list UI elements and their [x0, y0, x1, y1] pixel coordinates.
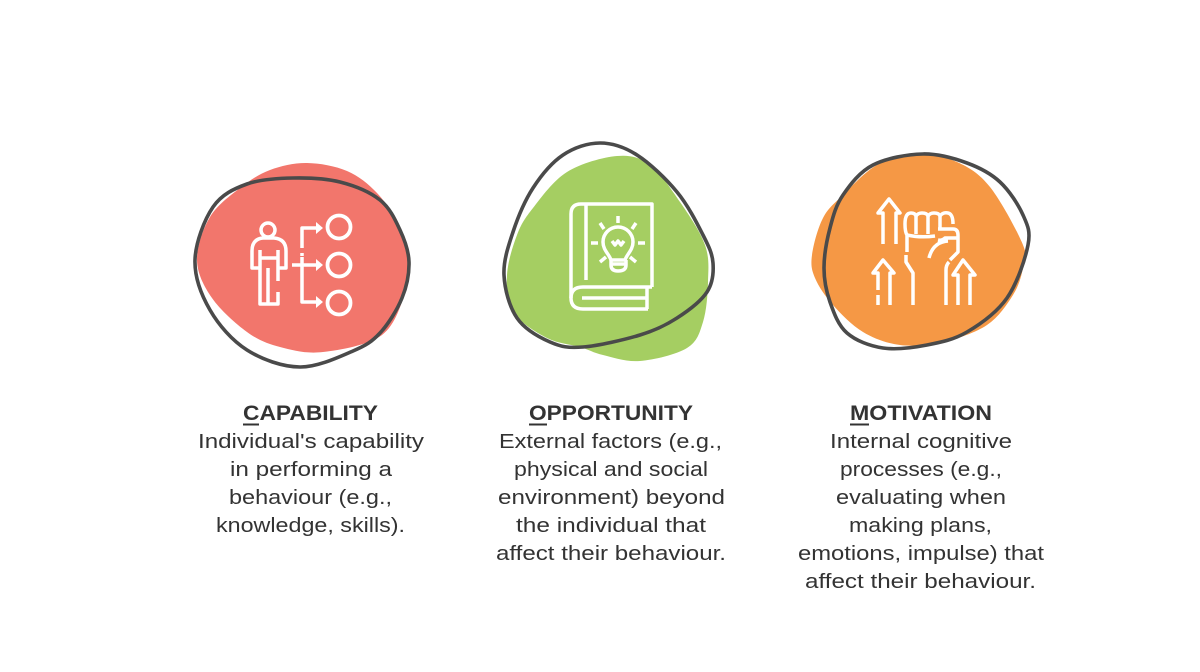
text block: motivation description: making plans, [849, 515, 992, 537]
text block: opportunity description: the individual that [516, 515, 707, 537]
text block: motivation description: Internal cognitive [830, 431, 1012, 453]
book [571, 204, 652, 309]
ring: dark outline [195, 178, 409, 367]
text block: opportunity description: External factors (e.g., [499, 431, 722, 453]
text block: opportunity description: affect their behaviour. [496, 543, 726, 565]
arrow: bottom left [873, 260, 894, 305]
panel: motivation [798, 154, 1045, 593]
text block: capability description: behaviour (e.g., [229, 487, 392, 509]
blob: green background [507, 156, 708, 361]
text block: capability description: Individual's capability [198, 431, 424, 453]
heading: capability: CAPABILITY [243, 402, 378, 425]
text block: motivation description [798, 431, 1045, 593]
arrow: bottom right [953, 260, 975, 305]
text block: motivation description: emotions, impulse) that [798, 543, 1045, 565]
icon: raised fist with arrows [873, 199, 975, 305]
light bulb [591, 216, 645, 271]
icon: person with three arrows to circles [252, 216, 350, 314]
panel: capability [195, 163, 424, 537]
icon: book with light bulb [571, 204, 652, 309]
outcome circles [328, 216, 350, 314]
text block: capability description: in performing a [230, 459, 393, 481]
text block: opportunity description [496, 431, 726, 565]
heading: opportunity: OPPORTUNITY [529, 402, 693, 425]
arrows [292, 222, 323, 308]
text block: opportunity description: physical and social [514, 459, 708, 481]
arrow: top left [878, 199, 900, 244]
heading: motivation: MOTIVATION [850, 402, 992, 425]
person [252, 223, 286, 304]
blob: orange background [811, 154, 1026, 346]
ring: dark outline [824, 154, 1029, 349]
fist [905, 213, 958, 305]
text block: motivation description: affect their behaviour. [805, 571, 1036, 593]
panel: opportunity [496, 143, 726, 565]
blob: red background [197, 163, 409, 353]
text block: motivation description: evaluating when [836, 487, 1006, 509]
text block: opportunity description: environment) beyond [498, 487, 725, 509]
text block: capability description: knowledge, skills). [216, 515, 405, 537]
ring: dark outline [504, 143, 713, 347]
text block: motivation description: processes (e.g., [840, 459, 1002, 481]
text block: capability description [198, 431, 424, 537]
